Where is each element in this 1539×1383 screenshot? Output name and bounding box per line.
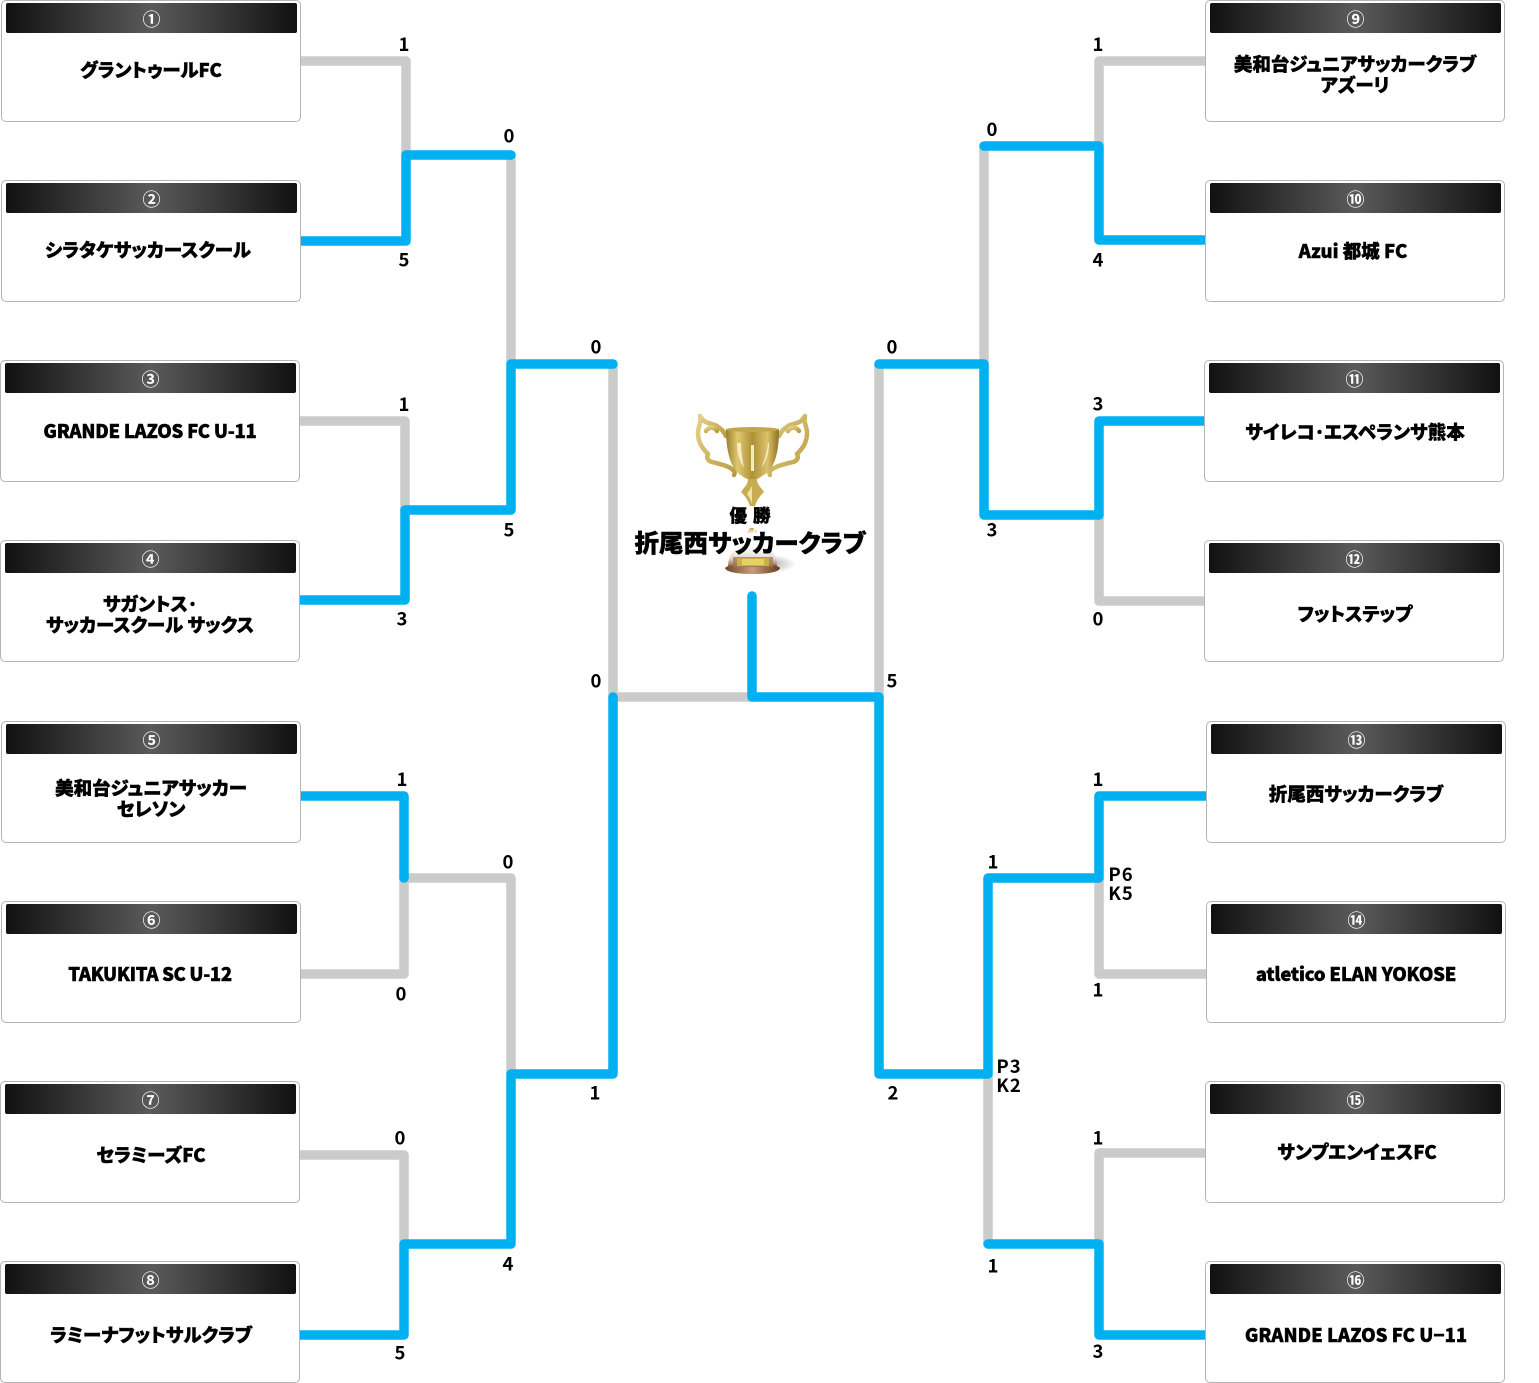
score labels: 4 [1093, 246, 1104, 272]
stem fragment [746, 528, 757, 534]
team card 1: ① [142, 6, 160, 32]
team card 12: フットステップ [1298, 601, 1412, 627]
team card 6: ⑥ [142, 907, 160, 933]
team card 3 [0, 360, 300, 482]
score labels: 3 [1093, 1338, 1103, 1364]
team card 12: ⑫ [1346, 546, 1364, 572]
team card 6: TAKUKITA SC U-12 [68, 961, 232, 987]
team card 7: ⑦ [142, 1087, 160, 1113]
team card 16: GRANDE LAZOS FC U−11 [1245, 1322, 1467, 1348]
score labels: K2 [996, 1072, 1022, 1098]
team card 5 [1, 721, 301, 843]
score labels: 2 [888, 1080, 898, 1106]
team card 8 [0, 1261, 300, 1383]
winner heading: 優 勝 [729, 503, 770, 528]
team card 13 [1206, 721, 1506, 843]
score labels: 1 [399, 391, 409, 417]
team card 14: ⑭ [1348, 907, 1366, 933]
score labels: 0 [395, 1124, 406, 1150]
team card 4: サガントス･ [103, 591, 197, 617]
score labels: 1 [1093, 31, 1103, 57]
team card 9: 美和台ジュニアサッカークラブ [1234, 51, 1476, 77]
team card 9: ⑨ [1346, 6, 1364, 32]
team card 5: 美和台ジュニアサッカー [55, 775, 247, 801]
score labels: 3 [987, 516, 997, 542]
team card 16: ⑯ [1346, 1267, 1364, 1293]
team card 5: ⑤ [142, 727, 160, 753]
team card 9: アズーリ [1321, 72, 1389, 98]
team card 8: ラミーナフットサルクラブ [50, 1322, 252, 1348]
score labels: 3 [1093, 390, 1103, 416]
score labels: 0 [987, 116, 998, 142]
score labels: 0 [503, 848, 514, 874]
score labels: 0 [396, 980, 407, 1006]
score labels: 1 [988, 1252, 998, 1278]
team card 10: Azui 都城 FC [1299, 238, 1407, 264]
team card 13: 折尾西サッカークラブ [1269, 781, 1443, 807]
score labels: 1 [397, 766, 407, 792]
team card 14: atletico ELAN YOKOSE [1256, 961, 1456, 987]
team card 3: ③ [142, 366, 160, 392]
team card 15: ⑮ [1346, 1087, 1364, 1113]
winning paths (blue) [300, 141, 1206, 1335]
score labels: 0 [887, 334, 898, 360]
team card 4 [0, 540, 300, 662]
score labels: 4 [503, 1250, 514, 1276]
score labels: K5 [1108, 880, 1134, 906]
score labels: 5 [504, 516, 514, 542]
team card 5: セレソン [117, 796, 185, 822]
score labels: P3 [996, 1053, 1022, 1079]
winning team: 折尾西サッカークラブ [635, 525, 865, 560]
handles [698, 416, 807, 475]
score labels: 5 [887, 668, 897, 694]
score labels: 5 [399, 246, 409, 272]
score labels: 1 [1093, 1124, 1103, 1150]
team card 11: ⑪ [1346, 366, 1364, 392]
score labels: 0 [591, 668, 602, 694]
score labels: 0 [504, 122, 515, 148]
team card 4: ④ [142, 546, 160, 572]
team card 1: グラントゥールFC [80, 57, 222, 83]
team card 10 [1205, 180, 1505, 302]
team card 11 [1204, 360, 1504, 482]
base [728, 547, 777, 567]
team card 9 [1205, 0, 1505, 122]
team card 2 [1, 180, 301, 302]
team card 8: ⑧ [142, 1267, 160, 1293]
team card 6 [1, 901, 301, 1023]
score labels: 1 [988, 848, 998, 874]
team card 12 [1204, 540, 1504, 662]
team card 7: セラミーズFC [96, 1142, 206, 1168]
team card 14 [1206, 901, 1506, 1023]
score labels: 0 [591, 334, 602, 360]
score labels: P6 [1108, 861, 1134, 887]
team card 13: ⑬ [1348, 727, 1366, 753]
team card 16 [1205, 1261, 1505, 1383]
score labels: 0 [1093, 606, 1104, 632]
team card 10: ⑩ [1346, 186, 1364, 212]
losing paths (gray) [300, 61, 1206, 1244]
cup bowl [726, 429, 779, 480]
team card 2: シラタケサッカースクール [45, 237, 251, 263]
winner label [634, 503, 866, 560]
team card 15 [1205, 1081, 1505, 1203]
score labels: 3 [397, 606, 407, 632]
score labels: 1 [399, 31, 409, 57]
score labels: 1 [590, 1080, 600, 1106]
score labels: 5 [395, 1340, 405, 1366]
team card 3: GRANDE LAZOS FC U-11 [43, 418, 257, 444]
stem [741, 479, 764, 506]
team card 11: サイレコ･エスペランサ熊本 [1245, 419, 1465, 445]
base shadow [728, 554, 796, 574]
score labels: 1 [1093, 976, 1103, 1002]
team card 1 [1, 0, 301, 122]
score labels: 1 [1093, 766, 1103, 792]
team card 4: サッカースクール サックス [46, 612, 254, 638]
team card 7 [0, 1081, 300, 1203]
team card 2: ② [142, 186, 160, 212]
team card 15: サンプエンイェスFC [1277, 1139, 1437, 1165]
